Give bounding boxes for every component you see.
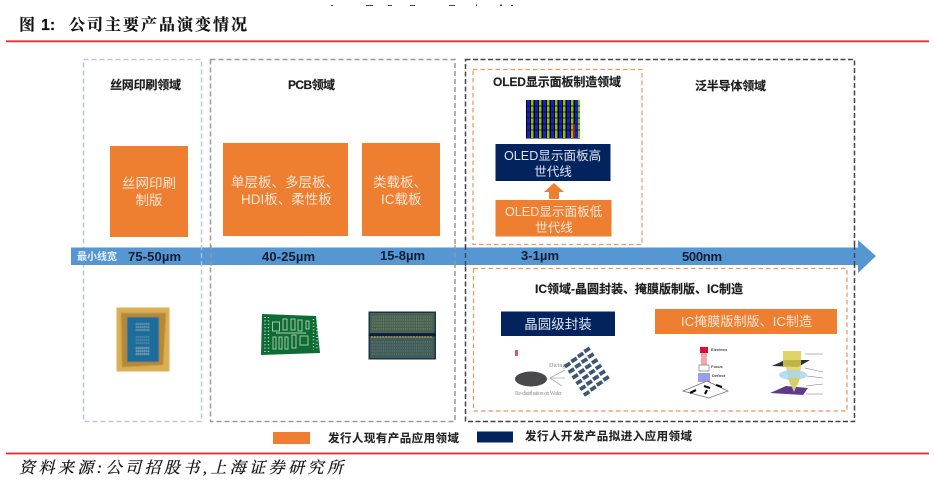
image: screen printing frame bbox=[116, 308, 170, 372]
value: 75-50µm: 75-50µm bbox=[128, 249, 181, 264]
heading: PCB: PCB领域 bbox=[288, 77, 335, 92]
image: electron beam diagram: Electron bbox=[711, 347, 728, 352]
box: wafer level packaging bbox=[501, 312, 615, 336]
heading: OLED: OLED显示面板制造领域 bbox=[493, 74, 621, 89]
box: substrate boards: 类载板、 bbox=[373, 175, 427, 190]
box: PCB boards: 单层板、多层板、 bbox=[231, 174, 339, 190]
title: 1: bbox=[41, 17, 55, 34]
box: PCB boards: HDI板、柔性板 bbox=[241, 192, 332, 207]
box: OLED high generation: 世代线 bbox=[534, 165, 572, 179]
clipped text fragments at the top edge bbox=[331, 4, 513, 6]
image: wafer dicing: Re-distribution on Wafer bbox=[515, 390, 562, 397]
image: IC substrate bbox=[368, 312, 436, 360]
box: wafer level packaging: 晶圆级封装 bbox=[524, 317, 592, 332]
legend label: existing: 发行人现有产品应用领域 bbox=[328, 431, 460, 445]
box: OLED high generation: OLED显示面板高 bbox=[504, 148, 601, 163]
image: wafer dicing bbox=[515, 348, 609, 397]
image: OLED pixels bbox=[526, 100, 580, 138]
box: substrate boards: IC载板 bbox=[381, 192, 422, 207]
value: 500nm: 500nm bbox=[682, 249, 722, 264]
panel: screen printing bbox=[84, 60, 202, 422]
box: IC mask and manufacturing: IC掩膜版制版、IC制造 bbox=[681, 314, 812, 329]
heading: pan-semiconductor: 泛半导体领域 bbox=[695, 78, 766, 93]
box: screen printing plate: 制版 bbox=[136, 193, 162, 208]
box: OLED low generation: 世代线 bbox=[535, 221, 573, 235]
header rule bbox=[6, 40, 929, 42]
heading: IC: IC领域-晶圆封装、掩膜版制版、IC制造 bbox=[535, 281, 743, 296]
title: 图 bbox=[19, 16, 35, 34]
legend label: planned: 发行人开发产品拟进入应用领域 bbox=[525, 429, 692, 443]
box: IC mask and manufacturing bbox=[655, 309, 837, 334]
box: screen printing plate bbox=[110, 146, 188, 237]
legend swatch: existing bbox=[273, 432, 310, 444]
box: OLED low generation: OLED显示面板低 bbox=[505, 205, 603, 219]
source note: 资料来源:公司招股书,上海证券研究所 bbox=[19, 459, 346, 477]
image: wafer dicing: Dicing bbox=[549, 363, 565, 369]
box: screen printing plate: 丝网印刷 bbox=[122, 176, 176, 191]
panel: IC bbox=[474, 268, 847, 411]
value: 40-25µm: 40-25µm bbox=[262, 249, 315, 264]
panel: OLED bbox=[473, 70, 642, 244]
legend swatch: planned bbox=[477, 432, 513, 442]
heading: screen printing: 丝网印刷领域 bbox=[110, 77, 181, 92]
value: 3-1µm: 3-1µm bbox=[521, 248, 559, 263]
box: substrate boards bbox=[362, 143, 440, 236]
axis label: 最小线宽 bbox=[77, 250, 117, 263]
title: 公司主要产品演变情况 bbox=[69, 15, 249, 34]
legend bbox=[273, 429, 692, 445]
box: OLED low generation bbox=[496, 200, 612, 236]
dashed panel edges over axis bbox=[202, 245, 854, 268]
box: OLED high generation bbox=[496, 144, 610, 181]
footer rule bbox=[6, 453, 929, 454]
image: lithography diagram bbox=[770, 351, 823, 395]
image: green PCB bbox=[261, 314, 320, 355]
box: PCB boards bbox=[223, 143, 348, 236]
image: electron beam diagram: Deflect bbox=[712, 373, 726, 378]
value: 15-8µm: 15-8µm bbox=[380, 248, 425, 263]
image: electron beam diagram: Focus bbox=[711, 364, 724, 369]
arrow: upgrade bbox=[544, 183, 564, 199]
image: electron beam diagram bbox=[683, 347, 728, 398]
arrow: minimum line width axis bbox=[71, 240, 876, 273]
panel: PCB bbox=[210, 60, 455, 422]
